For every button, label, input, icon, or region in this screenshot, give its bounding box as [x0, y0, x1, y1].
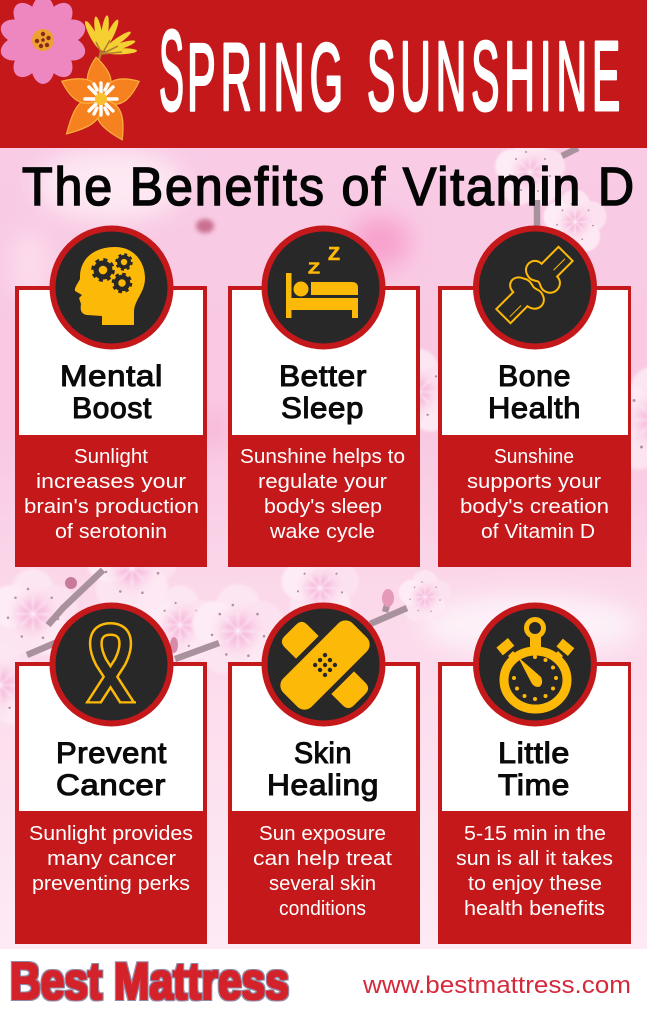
- text: Prevent Cancer description: [29, 823, 193, 895]
- text: Bone Health description: [460, 446, 609, 543]
- text: Skin Healing description: Sun exposure: [259, 823, 386, 845]
- label: Little Time: Little: [498, 737, 570, 770]
- text: Little Time description: health benefits: [464, 898, 605, 920]
- icon: stopwatch: [473, 602, 597, 726]
- panel: Skin Healing: [228, 596, 420, 944]
- label: Prevent Cancer: [56, 737, 167, 802]
- label: Bone Health: Health: [488, 392, 581, 425]
- text: Better Sleep description: Sunshine helps to: [240, 446, 405, 468]
- text: Better Sleep description: wake cycle: [269, 521, 375, 543]
- text: Bone Health description: of Vitamin D: [481, 521, 595, 543]
- label: Bone Health: [488, 360, 581, 425]
- icon: yellow flower: [83, 15, 137, 67]
- label: Mental Boost: Mental: [60, 360, 163, 393]
- icon: awareness ribbon: [50, 602, 174, 726]
- label: Prevent Cancer: Prevent: [56, 737, 167, 770]
- text: Little Time description: to enjoy these: [468, 873, 602, 895]
- panel: Better Sleep: [228, 226, 420, 567]
- text: Little Time description: [456, 823, 613, 920]
- icon: person sleeping in bed: Z: [328, 244, 340, 264]
- label: Better Sleep: [279, 360, 367, 425]
- label: Mental Boost: Boost: [72, 392, 152, 425]
- text: Mental Boost description: [24, 446, 199, 543]
- text: Little Time description: sun is all it takes: [456, 848, 613, 870]
- icon: crossed bandage: [256, 596, 394, 734]
- text: Prevent Cancer description: Sunlight provides: [29, 823, 193, 845]
- text: Better Sleep description: [240, 446, 405, 543]
- icon: pink flower: [0, 0, 89, 84]
- label: Skin Healing: Healing: [267, 769, 379, 802]
- label: Little Time: [498, 737, 570, 802]
- text: Prevent Cancer description: preventing perks: [32, 873, 190, 895]
- panel: Bone Health: [438, 226, 631, 567]
- header band: [0, 0, 647, 148]
- text: Skin Healing description: [253, 823, 392, 920]
- text: Mental Boost description: Sunlight: [74, 446, 148, 468]
- icon: person sleeping in bed: Z: [308, 260, 320, 278]
- icon: head with gears: [50, 226, 174, 350]
- panel: Mental Boost: [15, 226, 207, 567]
- panel: Prevent Cancer: [15, 602, 207, 944]
- text: Bone Health description: supports your: [467, 471, 601, 493]
- label: Better Sleep: Sleep: [281, 392, 364, 425]
- label: Bone Health: Bone: [498, 360, 571, 393]
- text: Little Time description: 5-15 min in the: [464, 823, 606, 845]
- text: Skin Healing description: conditions: [279, 898, 366, 920]
- text: Skin Healing description: can help treat: [253, 848, 392, 870]
- label: Little Time: Time: [498, 769, 570, 802]
- logo: Best Mattress: Best Mattress: [10, 953, 289, 1011]
- background: pink blossom backdrop: [0, 136, 647, 950]
- title: Spring Sunshine: [159, 8, 625, 135]
- text: Bone Health description: Sunshine: [494, 446, 574, 468]
- label: Mental Boost: [60, 360, 163, 425]
- label: Skin Healing: Skin: [294, 737, 352, 770]
- text: Better Sleep description: body's sleep: [264, 496, 382, 518]
- label: Skin Healing: [267, 737, 379, 802]
- text: Prevent Cancer description: many cancer: [47, 848, 176, 870]
- label: Better Sleep: Better: [279, 360, 367, 393]
- label: Prevent Cancer: Cancer: [56, 769, 166, 802]
- title: Spring Sunshine: PRING: [187, 24, 348, 131]
- text: Skin Healing description: several skin: [269, 873, 376, 895]
- icon: bone joint: [473, 226, 597, 350]
- text: Better Sleep description: regulate your: [258, 471, 387, 493]
- text: Mental Boost description: increases your: [36, 471, 186, 493]
- text: Mental Boost description: of serotonin: [55, 521, 167, 543]
- text: Mental Boost description: brain's production: [24, 496, 199, 518]
- panel: Little Time: [438, 602, 631, 944]
- link: website address: www.bestmattress.com: [362, 972, 631, 999]
- footer: [0, 949, 647, 1024]
- icon: person sleeping in bed: [262, 226, 386, 350]
- text: Bone Health description: body's creation: [460, 496, 609, 518]
- icon: orange flower: [57, 56, 144, 145]
- title: Spring Sunshine: S: [159, 8, 184, 135]
